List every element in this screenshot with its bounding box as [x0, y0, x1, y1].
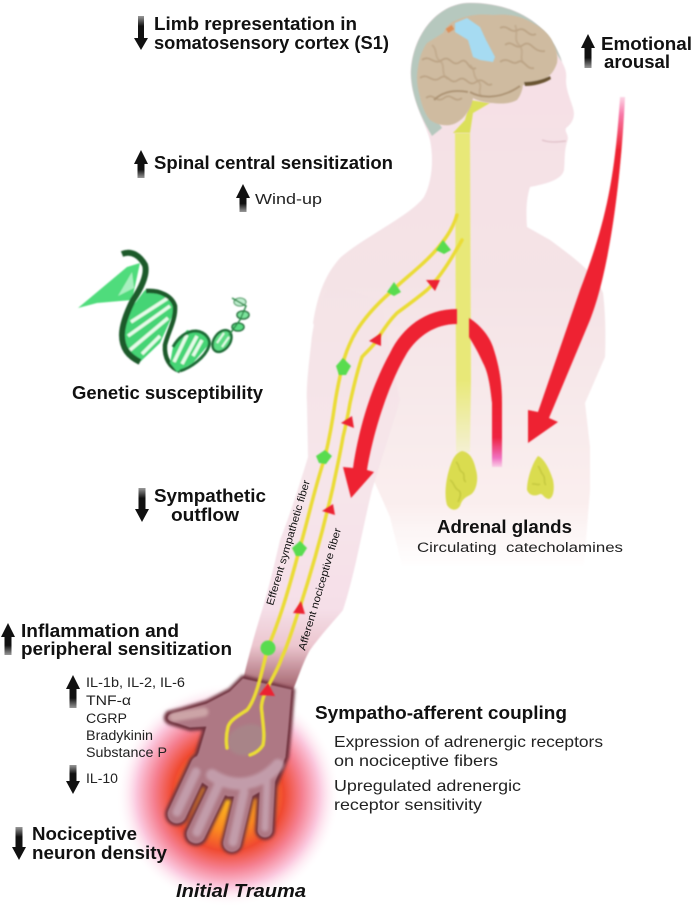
text block: sympatho-afferent coupling: on nociceptive fibers	[334, 753, 498, 770]
hand	[166, 677, 293, 843]
efferent nerve fiber	[226, 215, 457, 748]
label: efferent sympathetic fiber: Efferent sympathetic fiber	[264, 478, 313, 607]
text block: sympatho-afferent coupling: receptor sensitivity	[334, 797, 482, 814]
heading: emotional arousal	[581, 34, 692, 72]
heading: spinal central sensitization: Spinal central sensitization	[154, 153, 393, 173]
heading: limb representation	[134, 14, 389, 53]
heading: adrenal glands: Circulating catecholamines	[417, 540, 623, 555]
heading: sympathetic outflow	[135, 486, 266, 525]
heading: inflammation	[1, 621, 232, 659]
heading: limb representation: Limb representation in	[154, 14, 357, 34]
list: cytokines up: IL-1b, IL-2, IL-6	[86, 675, 185, 690]
DNA helix	[78, 253, 249, 372]
text block: sympatho-afferent coupling: Expression of adrenergic receptors	[334, 734, 603, 751]
list: IL-10 down	[66, 765, 118, 794]
red triangles	[259, 280, 440, 696]
label: wind-up: Wind-up	[255, 191, 322, 208]
afferent nerve fiber	[250, 240, 462, 755]
red sympathetic arrow	[343, 309, 502, 498]
spinal cord	[455, 133, 471, 452]
text block: sympatho-afferent coupling	[315, 703, 603, 814]
list: IL-10 down: IL-10	[86, 771, 118, 786]
blue somatosensory region	[455, 18, 495, 62]
hand highlights	[174, 712, 278, 842]
green markers	[260, 240, 451, 656]
heading: nociceptive neuron density: neuron density	[32, 843, 167, 863]
hand fill	[168, 679, 291, 843]
heading: nociceptive neuron density: Nociceptive	[32, 824, 137, 844]
red emotional arousal arrow	[528, 97, 625, 443]
label: afferent nociceptive fiber: Afferent nociceptive fiber	[296, 526, 344, 652]
list: cytokines up: Substance P	[86, 745, 167, 760]
brainstem	[453, 100, 490, 133]
human body silhouette	[243, 3, 605, 690]
text block: sympatho-afferent coupling: Upregulated adrenergic	[334, 778, 521, 795]
heading: sympathetic outflow: Sympathetic	[154, 486, 266, 506]
heading: adrenal glands: Adrenal glands	[437, 517, 572, 537]
palm centre	[228, 724, 266, 755]
heading: adrenal glands	[417, 517, 623, 555]
hand dark outline	[166, 677, 293, 843]
heading: inflammation: peripheral sensitization	[21, 639, 232, 659]
list: cytokines up: Bradykinin	[86, 728, 153, 743]
list: cytokines up: CGRP	[86, 711, 127, 726]
adrenal gland left	[446, 451, 477, 510]
skull outline halo	[411, 3, 562, 136]
list: cytokines up: TNF-α	[86, 693, 131, 708]
brain	[417, 15, 557, 125]
heading: emotional arousal: Emotional	[601, 34, 692, 54]
text block: sympatho-afferent coupling: Sympatho-afferent coupling	[315, 703, 567, 723]
list: cytokines up	[66, 675, 185, 760]
heading: nociceptive neuron density	[12, 824, 167, 863]
glow: initial trauma	[114, 683, 338, 907]
heading: emotional arousal: arousal	[604, 52, 670, 72]
label: initial trauma: Initial Trauma	[176, 881, 306, 901]
heading: spinal central sensitization	[134, 150, 393, 178]
adrenal gland right	[527, 456, 554, 499]
heading: sympathetic outflow: outflow	[171, 505, 240, 525]
heading: genetic susceptibility: Genetic susceptibility	[72, 383, 263, 403]
heading: inflammation: Inflammation and	[21, 621, 179, 641]
heading: limb representation: somatosensory cortex (S1)	[154, 33, 389, 53]
label: wind-up	[236, 184, 322, 212]
